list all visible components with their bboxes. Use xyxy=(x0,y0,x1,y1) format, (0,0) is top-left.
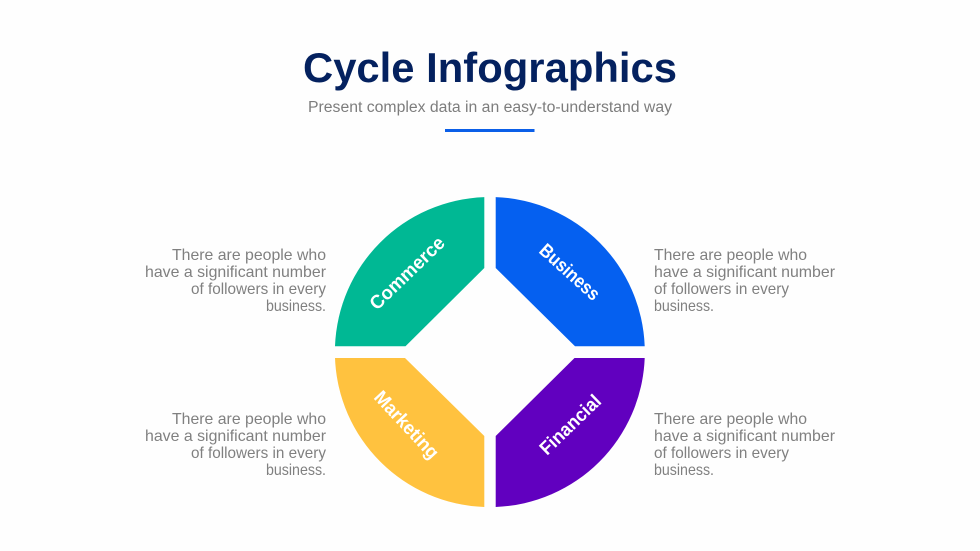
text block: Commerce description: have a significant number xyxy=(145,264,327,281)
segment: Business: Business xyxy=(535,240,604,305)
text block: Commerce description xyxy=(145,247,327,315)
cycle diagram xyxy=(335,197,645,507)
text block: Marketing description xyxy=(145,411,327,479)
text block: Financial description: There are people who xyxy=(654,411,807,428)
text block: Commerce description: of followers in every xyxy=(191,281,326,298)
text block: Financial description xyxy=(654,411,836,479)
text block: Business description: of followers in every xyxy=(654,281,789,298)
segment: Business xyxy=(496,197,645,346)
segment: Commerce: Commerce xyxy=(366,233,450,315)
text block: Marketing description: of followers in every xyxy=(191,445,326,462)
text block: Marketing description: There are people who xyxy=(172,411,326,428)
text block: Financial description: business. xyxy=(654,462,714,479)
title underline xyxy=(445,129,534,132)
text block: Financial description: of followers in every xyxy=(654,445,789,462)
segment: Financial: Financial xyxy=(536,391,606,460)
text block: Business description: have a significant number xyxy=(654,264,836,281)
subtitle: Present complex data in an easy-to-understand way xyxy=(308,99,672,116)
text block: Commerce description: There are people who xyxy=(172,247,326,264)
text block: Commerce description: business. xyxy=(266,298,326,315)
segment: Financial xyxy=(496,358,645,507)
segment: Marketing: Marketing xyxy=(369,387,443,464)
segment: Commerce xyxy=(335,197,484,346)
text block: Business description: There are people who xyxy=(654,247,807,264)
segment: Marketing xyxy=(335,358,484,507)
text block: Financial description: have a significant number xyxy=(654,428,836,445)
text block: Business description: business. xyxy=(654,298,714,315)
text block: Marketing description: business. xyxy=(266,462,326,479)
text block: Business description xyxy=(654,247,836,315)
title: Cycle Infographics xyxy=(303,44,677,91)
text block: Marketing description: have a significant number xyxy=(145,428,327,445)
